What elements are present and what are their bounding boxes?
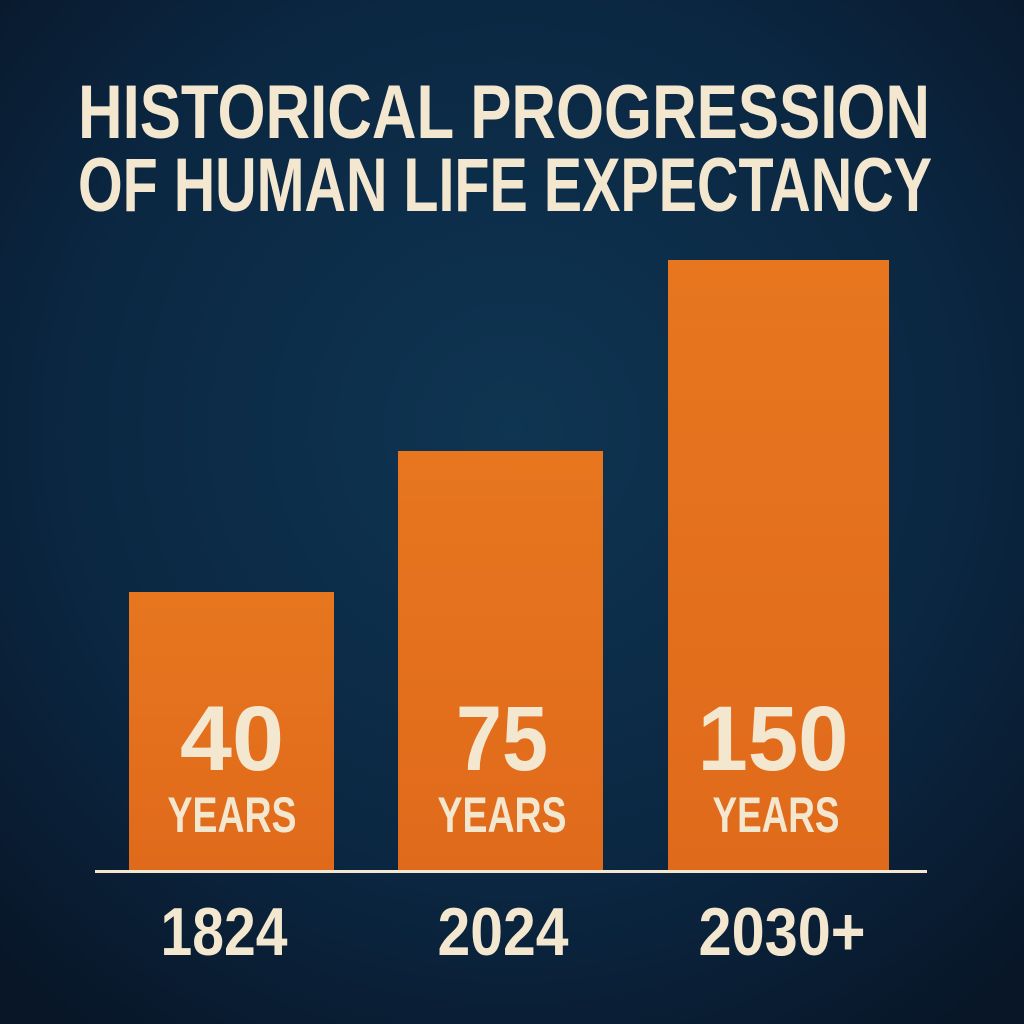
bar: 2024 xyxy=(398,451,603,871)
baseline axis xyxy=(95,870,927,873)
bar: 1824: YEARS xyxy=(168,787,296,843)
bar: 1824: 40 xyxy=(180,688,284,790)
bar: 2024: YEARS xyxy=(438,787,566,843)
year labels: 2030+ xyxy=(698,894,866,970)
year labels xyxy=(160,894,866,970)
year labels: 2024 xyxy=(438,894,569,970)
year labels: 1824 xyxy=(160,894,288,970)
bar: 2030+: YEARS xyxy=(712,787,840,843)
bar: 2024: 75 xyxy=(456,688,548,790)
bar: 1824 xyxy=(129,592,334,871)
bar: 2030+ xyxy=(668,260,889,871)
bar: 2030+: 150 xyxy=(698,688,848,790)
title xyxy=(78,70,932,228)
